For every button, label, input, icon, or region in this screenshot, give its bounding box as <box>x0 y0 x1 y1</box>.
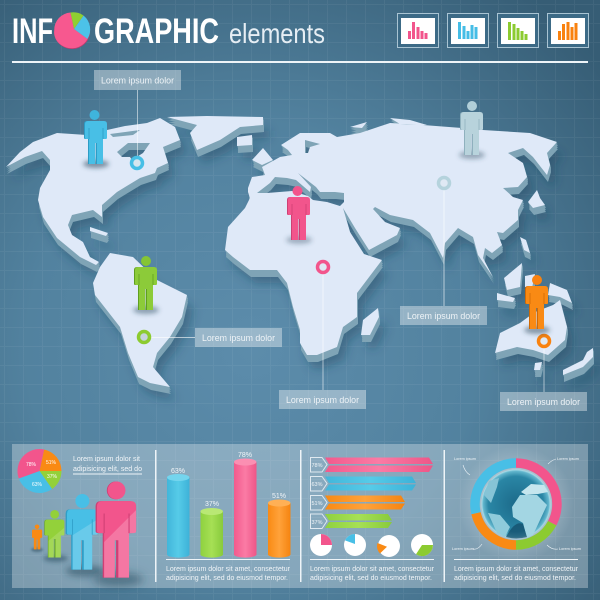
text block: adipisicing elit, sed do eiusmod tempor. <box>454 575 576 582</box>
ring labels: Lorem ipsum <box>559 547 581 551</box>
bar: 51% orange: 51% <box>272 493 286 500</box>
text block: Lorem ipsum dolor sit <box>73 456 140 463</box>
title: elements <box>229 18 325 49</box>
title <box>12 12 325 51</box>
bar: 37% green: 37% <box>205 501 219 508</box>
pie chart: 51% <box>46 460 57 466</box>
text block <box>166 566 291 582</box>
ring labels: Lorem ipsum <box>452 547 474 551</box>
callout: north america <box>94 70 181 168</box>
text block: Lorem ipsum dolor sit amet, consectetur <box>454 566 579 573</box>
person: small orange <box>31 524 43 552</box>
arrow bar 37%: 37% <box>311 520 323 526</box>
bar: 63% blue: 63% <box>171 468 185 475</box>
small pie: pink <box>310 534 332 556</box>
icon: orange bar chart <box>548 14 588 48</box>
divider <box>444 450 445 582</box>
callout: asia <box>400 178 487 325</box>
icon: title pie chart <box>54 12 90 49</box>
text block: adipisicing elit, sed do eiusmod tempor. <box>166 575 288 582</box>
globe <box>480 468 552 540</box>
ring chart <box>475 463 557 545</box>
person: orange, australia <box>524 275 550 334</box>
person: green, south america <box>133 256 159 314</box>
person: blue <box>66 494 105 577</box>
small pie: orange <box>377 535 400 557</box>
divider <box>155 450 156 582</box>
panel: arrow bars and small pies <box>310 458 435 582</box>
person: pink, africa <box>286 186 312 244</box>
text block: adipisicing elit, sed do eiusmod tempor. <box>310 575 432 582</box>
text block <box>73 456 142 473</box>
person: pink <box>93 482 143 587</box>
divider <box>300 450 302 582</box>
callout: south america <box>138 328 282 347</box>
panel: cylinder bar chart <box>166 452 291 582</box>
arrow bar 51%: 51% <box>311 501 323 507</box>
bar: 78% pink: 78% <box>238 452 252 459</box>
small pie: blue <box>344 534 366 556</box>
callout: north america: Lorem ipsum dolor <box>101 76 174 86</box>
callout: australia: Lorem ipsum dolor <box>507 397 580 408</box>
arrow bar 63%: 63% <box>311 482 323 488</box>
callout: asia: Lorem ipsum dolor <box>407 311 480 322</box>
text block: Lorem ipsum dolor sit amet, consectetur <box>310 566 435 573</box>
panel: bottom charts background <box>12 444 588 588</box>
person: green <box>43 510 68 562</box>
ring labels: Lorem ipsum <box>557 457 579 461</box>
title: INF <box>12 12 53 51</box>
world map <box>6 116 599 400</box>
icon: green bar chart <box>498 14 538 48</box>
pie chart: 37% <box>47 474 58 480</box>
arrow bar 78%: 78% <box>311 463 323 469</box>
callout: australia <box>500 336 587 411</box>
pie chart: 78% <box>26 462 37 468</box>
header rule <box>12 61 588 63</box>
callout: africa: Lorem ipsum dolor <box>286 395 359 406</box>
ring labels <box>452 457 581 551</box>
icon: pink bar chart <box>398 14 438 48</box>
text block <box>454 566 579 582</box>
pie chart: 63% <box>32 482 43 488</box>
text block: adipisicing elit, sed do <box>73 466 142 473</box>
panel: people and pie <box>17 449 143 587</box>
title: GRAPHIC <box>94 12 219 51</box>
callout: africa <box>279 262 366 409</box>
person: grey, asia <box>459 101 485 159</box>
panel: globe ring chart <box>452 446 581 582</box>
pie chart <box>17 449 62 493</box>
person: blue, north america <box>83 110 109 168</box>
icon: blue bar chart <box>448 14 488 48</box>
text block: Lorem ipsum dolor sit amet, consectetur <box>166 566 291 573</box>
small pie: green <box>411 534 433 556</box>
text block <box>310 566 435 582</box>
ring labels: Lorem ipsum <box>454 457 476 461</box>
callout: south america: Lorem ipsum dolor <box>202 333 275 344</box>
